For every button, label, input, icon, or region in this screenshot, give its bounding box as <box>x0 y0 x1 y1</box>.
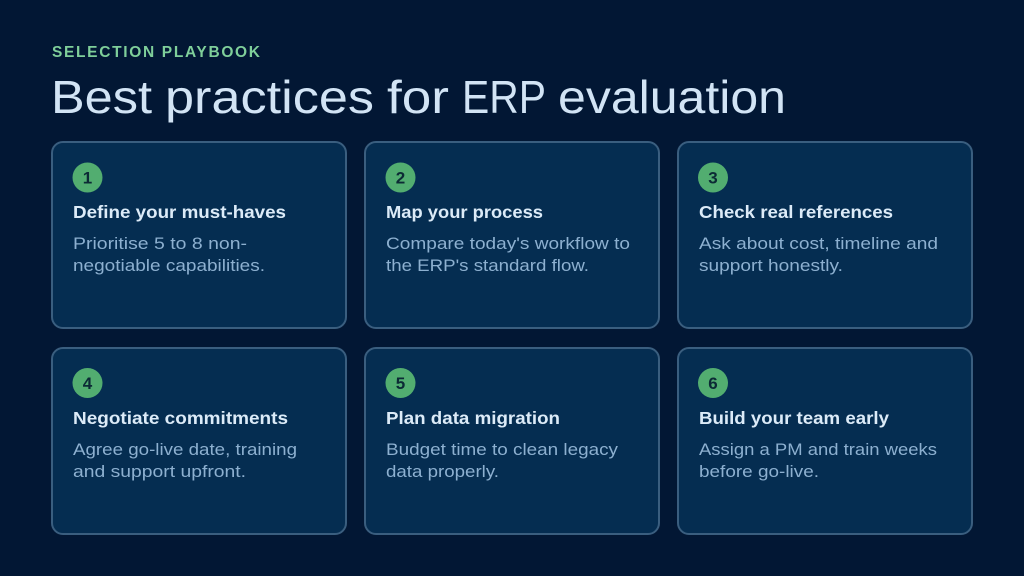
body: card 3 <box>699 234 938 275</box>
heading: card 1: Define your must-haves <box>73 202 286 222</box>
body: card 4: Agree go-live date, training <box>73 440 297 459</box>
body: card 1: Prioritise 5 to 8 non- <box>73 234 247 253</box>
body: card 6: before go-live. <box>699 462 819 481</box>
title: Best <box>51 71 152 123</box>
panel: card 1 <box>52 142 346 328</box>
panel: card 2 <box>365 142 659 328</box>
eyebrow label: SELECTION PLAYBOOK <box>52 44 261 61</box>
panel: card 6 <box>678 348 972 534</box>
icon: number 4 badge: 4 <box>83 374 93 393</box>
title: evaluation <box>558 71 786 123</box>
heading: card 2: Map your process <box>386 202 543 222</box>
body: card 6: Assign a PM and train weeks <box>699 440 937 459</box>
body: card 4: and support upfront. <box>73 462 246 481</box>
heading: card 4: Negotiate commitments <box>73 408 288 428</box>
body: card 4 <box>73 440 297 481</box>
icon: number 1 badge: 1 <box>83 168 92 188</box>
icon: number 2 badge: 2 <box>396 168 405 188</box>
icon: number 1 badge <box>72 162 102 192</box>
icon: number 3 badge <box>698 162 728 192</box>
title: practices <box>165 71 374 123</box>
panel: card 5 <box>365 348 659 534</box>
body: card 1: negotiable capabilities. <box>73 256 265 275</box>
heading: card 5: Plan data migration <box>386 408 560 428</box>
body: card 2 <box>386 234 630 275</box>
icon: number 3 badge: 3 <box>708 168 718 188</box>
body: card 3: support honestly. <box>699 256 843 275</box>
heading: card 6: Build your team early <box>699 408 889 428</box>
body: card 5: Budget time to clean legacy <box>386 440 619 459</box>
heading: card 3: Check real references <box>699 202 893 222</box>
body: card 1 <box>73 234 265 275</box>
body: card 5: data properly. <box>386 462 499 481</box>
body: card 6 <box>699 440 937 481</box>
icon: number 5 badge <box>386 368 416 398</box>
icon: number 2 badge <box>386 162 416 192</box>
body: card 3: Ask about cost, timeline and <box>699 234 938 253</box>
panel: card 3 <box>678 142 972 328</box>
body: card 5 <box>386 440 619 481</box>
panel: card 4 <box>52 348 346 534</box>
body: card 2: the ERP's standard flow. <box>386 256 589 275</box>
title: ERP <box>462 71 546 123</box>
body: card 2: Compare today's workflow to <box>386 234 630 253</box>
icon: number 6 badge <box>698 368 728 398</box>
icon: number 5 badge: 5 <box>396 374 405 393</box>
title <box>51 71 786 123</box>
icon: number 6 badge: 6 <box>708 374 718 393</box>
title: for <box>387 71 449 123</box>
icon: number 4 badge <box>72 368 102 398</box>
